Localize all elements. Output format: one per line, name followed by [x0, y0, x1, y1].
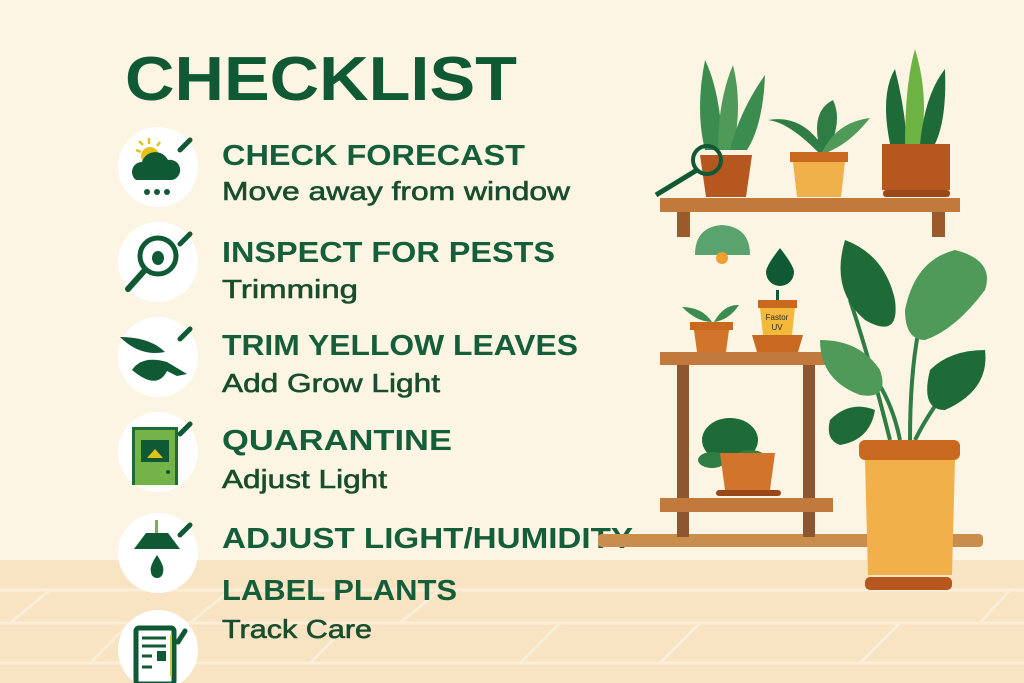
item 3: trim yellow leaves [118, 317, 578, 398]
item 1: check forecast: CHECK FORECAST [222, 140, 525, 172]
item 3: trim yellow leaves: Add Grow Light [222, 368, 441, 398]
fastor UV pot [752, 290, 803, 352]
icon: shears leaf [118, 317, 198, 397]
leafy plant pot 2 [768, 100, 870, 197]
item 4: quarantine: QUARANTINE [222, 425, 452, 457]
illustration: plant shelves [598, 49, 987, 590]
icon: magnifier bug [118, 222, 198, 302]
item 1: check forecast: Move away from window [222, 176, 570, 206]
fastor UV pot: UV [771, 323, 783, 332]
icon: lamp drop [118, 513, 198, 593]
item 4: quarantine [118, 412, 452, 494]
water drop [766, 248, 794, 286]
item 6: label plants: LABEL PLANTS [222, 575, 457, 607]
floor board [598, 534, 983, 547]
item 5: adjust light/humidity [118, 513, 633, 593]
sansevieria pot 3 [882, 49, 950, 197]
title: CHECKLIST [125, 45, 517, 114]
item 5: adjust light/humidity: ADJUST LIGHT/HUMIDITY [222, 523, 633, 555]
big plant [820, 240, 987, 590]
small seedling pot [682, 305, 739, 352]
item 6: label plants [118, 575, 457, 683]
item 2: inspect for pests: INSPECT FOR PESTS [222, 237, 555, 269]
lamp [695, 225, 750, 264]
item 2: inspect for pests [118, 222, 555, 304]
floor [0, 560, 1024, 683]
item 3: trim yellow leaves: TRIM YELLOW LEAVES [222, 330, 578, 362]
plant under stand [698, 418, 781, 496]
stand [660, 352, 833, 537]
item 6: label plants: Track Care [222, 614, 372, 644]
top shelf [660, 198, 960, 237]
snake plant with magnifier [656, 60, 765, 197]
fastor UV pot: Fastor [766, 313, 789, 322]
item 4: quarantine: Adjust Light [222, 464, 388, 494]
item 1: check forecast [118, 127, 570, 207]
icon: notes [118, 610, 198, 683]
icon: weather [118, 127, 198, 207]
icon: door [118, 412, 198, 492]
item 2: inspect for pests: Trimming [222, 274, 358, 304]
